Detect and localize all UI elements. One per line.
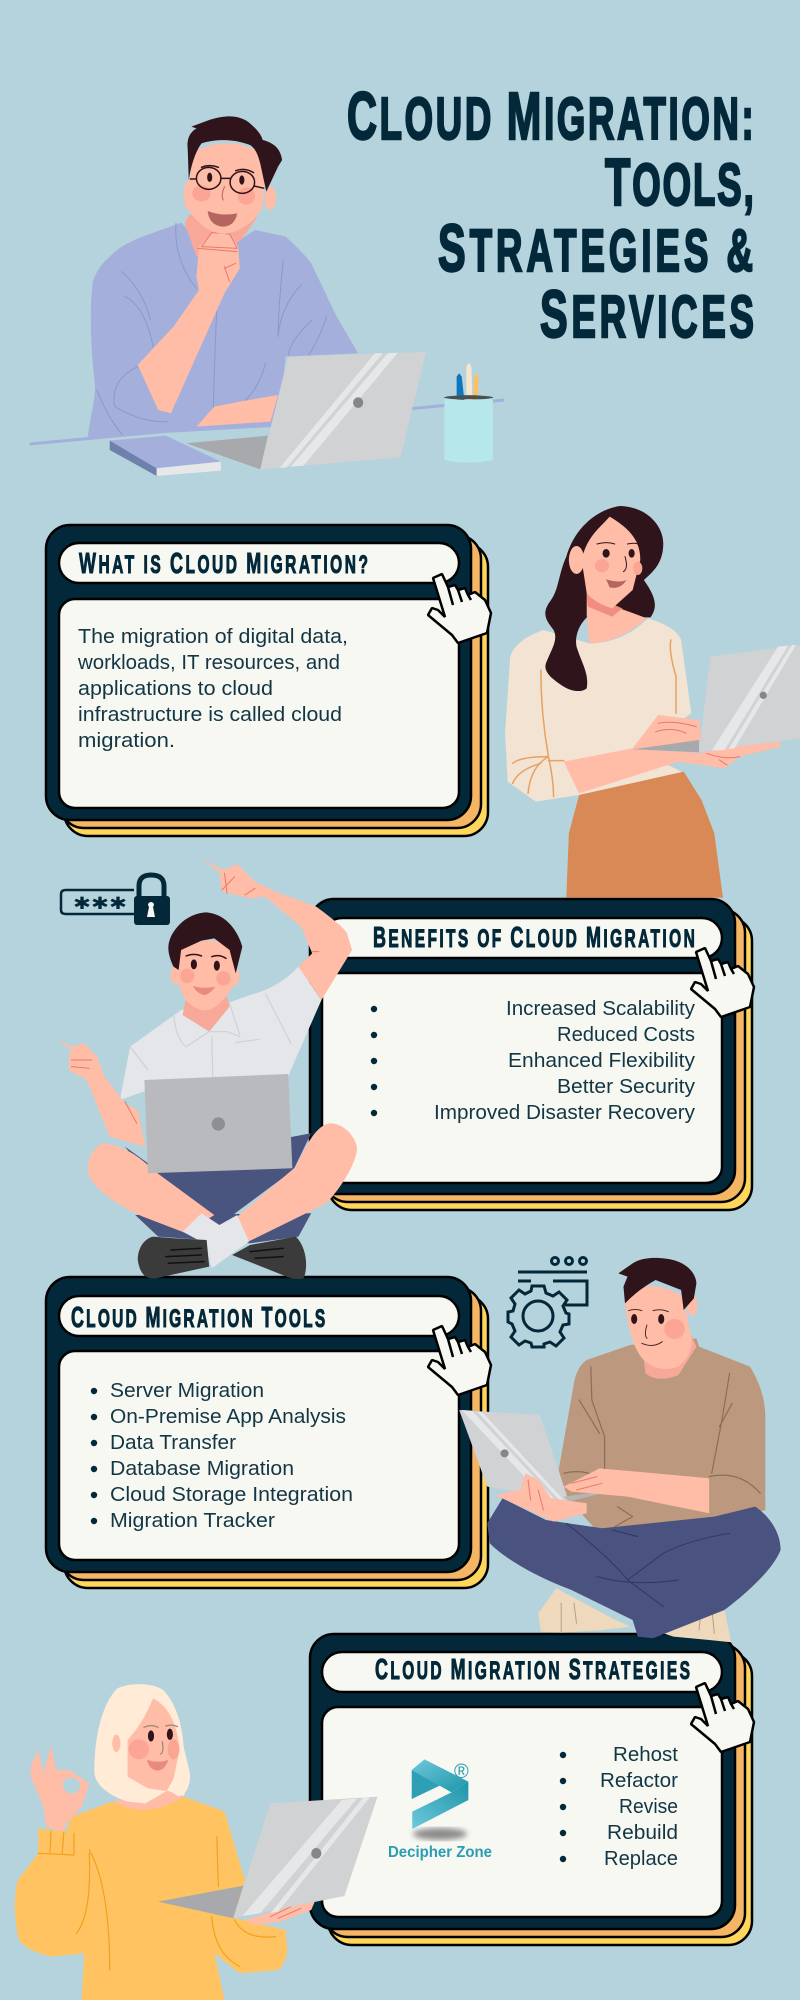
list: Enhanced Flexibility xyxy=(508,1050,695,1072)
title: SERVICES xyxy=(540,277,754,351)
illustration: man in brown sweater xyxy=(459,1258,781,1642)
logo: Decipher Zone xyxy=(388,1759,492,1861)
title: STRATEGIES & xyxy=(438,211,753,285)
panel: benefits of cloud migration xyxy=(310,899,754,1210)
logo: Decipher Zone: ® xyxy=(454,1761,469,1783)
icon: cursor hand xyxy=(691,1683,754,1752)
body text: migration. xyxy=(78,730,175,752)
list: Refactor xyxy=(600,1770,678,1792)
panel: cloud migration tools xyxy=(46,1277,491,1588)
list: Data Transfer xyxy=(110,1432,236,1454)
heading: CLOUD MIGRATION TOOLS xyxy=(71,1302,325,1334)
icon: cursor hand xyxy=(428,1326,491,1395)
body text: The migration of digital data, xyxy=(78,626,348,648)
body text: infrastructure is called cloud xyxy=(78,704,342,726)
illustration: man pointing, sitting cross-legged xyxy=(56,859,357,1279)
body text xyxy=(77,626,348,752)
icon: cursor hand xyxy=(691,948,754,1017)
illustration: man with glasses at desk xyxy=(30,116,504,476)
icon: cursor hand xyxy=(428,574,491,643)
illustration: blonde woman with laptop xyxy=(15,1684,378,2000)
heading: CLOUD MIGRATION STRATEGIES xyxy=(375,1654,690,1686)
list: Rehost xyxy=(613,1744,678,1766)
title xyxy=(347,79,754,351)
logo: Decipher Zone: Decipher Zone xyxy=(388,1844,492,1861)
list: Reduced Costs xyxy=(557,1024,695,1046)
list xyxy=(91,1380,353,1532)
list: Increased Scalability xyxy=(506,998,695,1020)
title: CLOUD MIGRATION: xyxy=(347,79,754,153)
list: Rebuild xyxy=(607,1822,678,1844)
list xyxy=(371,998,695,1124)
list: Migration Tracker xyxy=(110,1510,275,1532)
title: TOOLS, xyxy=(605,145,754,219)
icon: password and padlock xyxy=(61,875,170,925)
list: Server Migration xyxy=(110,1380,264,1402)
list: Better Security xyxy=(557,1076,695,1098)
heading: BENEFITS OF CLOUD MIGRATION xyxy=(373,922,695,954)
list: Database Migration xyxy=(110,1458,294,1480)
illustration: woman with laptop xyxy=(505,506,800,898)
list: On-Premise App Analysis xyxy=(110,1406,346,1428)
panel: cloud migration strategies xyxy=(310,1634,754,1945)
list: Replace xyxy=(604,1848,678,1870)
panel: what is cloud migration xyxy=(46,525,491,836)
list: Improved Disaster Recovery xyxy=(434,1102,695,1124)
icon: gear and window xyxy=(508,1258,587,1347)
body text: applications to cloud xyxy=(78,678,273,700)
list: Revise xyxy=(619,1796,678,1818)
body text: workloads, IT resources, and xyxy=(77,652,340,674)
list xyxy=(560,1744,678,1870)
heading: WHAT IS CLOUD MIGRATION? xyxy=(79,548,368,580)
icon: password and padlock: ✱✱✱ xyxy=(73,894,127,914)
list: Cloud Storage Integration xyxy=(110,1484,353,1506)
